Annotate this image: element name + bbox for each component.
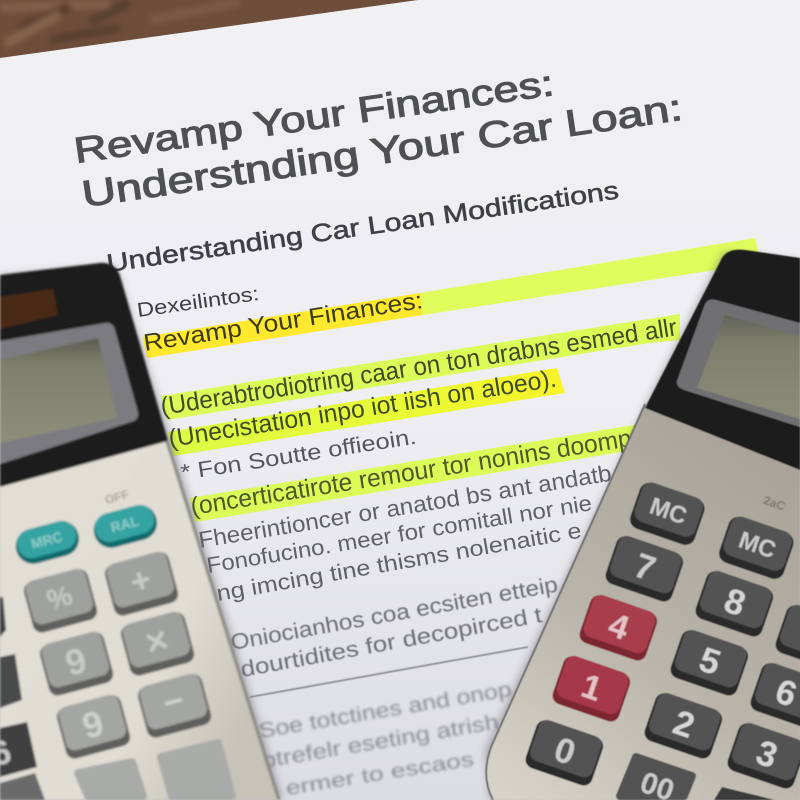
body paragraph one: Fonofucino. meer for comitall nor nie — [205, 490, 594, 578]
key: multiply — [119, 609, 196, 678]
body paragraph two — [228, 572, 560, 682]
heading: document title: Revamp Your Finances: — [71, 62, 556, 171]
label: Dexellintos: Dexeilintos: — [136, 283, 260, 322]
key: teal RAL: RAL — [109, 512, 141, 535]
divider line — [250, 647, 528, 697]
key: percent — [22, 566, 99, 635]
key: teal RAL — [90, 501, 161, 552]
key: 8 — [693, 568, 776, 639]
key: red 4: 4 — [604, 606, 634, 648]
yellow highlight band — [143, 293, 423, 358]
left solar panel — [0, 289, 58, 329]
right calculator body — [486, 404, 800, 800]
key: minus — [136, 671, 213, 740]
right display frame — [677, 300, 800, 427]
body paragraph one: Fheerintioncer or anatod bs ant andatb — [197, 460, 613, 553]
key: teal MRC — [12, 517, 83, 568]
key: 3 — [725, 720, 800, 791]
key: 0 — [523, 717, 606, 788]
body paragraph three (out of focus): ermer to escaos — [284, 748, 475, 800]
body paragraph one — [197, 460, 613, 606]
left display frame — [0, 323, 138, 464]
key: 2 — [642, 690, 725, 761]
key: nine — [38, 629, 115, 698]
key: red 4 — [577, 592, 660, 663]
key: teal MRC: MRC — [29, 528, 64, 552]
heading: document title: Understnding Your Car Loan: — [79, 87, 685, 215]
lime highlight line two — [161, 314, 680, 420]
right calculator black head — [645, 250, 800, 470]
key: bottom grey — [78, 762, 143, 796]
body paragraph three (out of focus) — [257, 678, 513, 800]
printed label above RAL key: OFF — [104, 487, 130, 507]
calculator shadows — [0, 252, 800, 800]
key: 5 — [668, 627, 751, 698]
key: 00 — [620, 757, 692, 800]
body paragraph two: dourtidites for decopirced t — [238, 602, 544, 682]
right calculator — [486, 250, 800, 800]
key: nine lower — [55, 692, 132, 761]
key: MC left — [627, 479, 708, 548]
key: bottom right partial — [714, 787, 775, 800]
body paragraph one: ng imcing tine thisms nolenaitic e — [215, 518, 583, 606]
lime highlight band — [420, 238, 761, 315]
key: 9 partial — [773, 602, 800, 673]
key: nine: 9 — [61, 639, 91, 684]
key: 0: 0 — [549, 730, 580, 773]
left calculator body — [0, 441, 277, 800]
body paragraph three (out of focus): Soe totctines and onop — [257, 678, 513, 743]
wooden table corner — [0, 0, 418, 58]
key: percent: % — [44, 579, 76, 616]
key: red 1: 1 — [577, 667, 607, 709]
left LCD screen — [0, 338, 117, 443]
key: plus — [103, 549, 180, 618]
key: multiply: × — [141, 619, 173, 665]
key: MC left: MC — [646, 493, 690, 530]
key: 6 — [748, 660, 800, 731]
line text: oncerticatirote: (oncerticatirote remour tor nonins doomp — [189, 424, 634, 521]
body paragraph three (out of focus): ptrefelr eseting atrish — [260, 711, 501, 773]
key: 7: 7 — [629, 546, 660, 589]
right LCD screen — [697, 315, 800, 419]
key: 8: 8 — [719, 581, 750, 624]
highlighted text lines — [142, 287, 679, 521]
left calculator edge shade — [167, 441, 279, 800]
line text: Unecistation: (Unecistation inpo iot iish on aloeo). — [167, 365, 558, 453]
highlighted section — [143, 238, 761, 522]
key: left dark middle — [0, 654, 22, 708]
key: MC right: MC — [735, 527, 779, 564]
key: left dark six — [0, 722, 37, 777]
key: 7 — [603, 533, 686, 604]
subheading: car loan modifications: Understanding Car Loan Modifications — [105, 176, 621, 278]
key: MC right — [716, 513, 797, 582]
left calculator — [0, 263, 279, 800]
key: 3: 3 — [751, 733, 782, 776]
line text: Fon Soutte: * Fon Soutte offieoin. — [179, 424, 418, 485]
printed label 2aC: 2aC — [762, 493, 787, 514]
key: bottom large grey — [161, 743, 232, 796]
body paragraph two: Oniocianhos coa ecsiten etteip — [228, 572, 560, 655]
left calculator black head — [0, 263, 168, 487]
key: red 1 — [550, 653, 633, 724]
key: minus: − — [159, 681, 188, 723]
line text: Uderabtrodiotring: (Uderabtrodiotring caar on ton drabns esmed allr — [159, 313, 679, 421]
lime highlight line four — [190, 424, 640, 522]
key: 2: 2 — [668, 703, 699, 746]
yellow-lime highlight line three — [168, 368, 565, 456]
key: nine lower: 9 — [78, 702, 108, 747]
yellow line text: Revamp Your Finances: — [142, 287, 425, 357]
key: left dark upper — [0, 597, 6, 637]
right calculator edge — [486, 404, 645, 800]
key: plus: + — [126, 560, 155, 602]
key: 5: 5 — [694, 640, 725, 683]
heading: document title — [71, 62, 685, 215]
key: left dark bottom — [0, 773, 45, 800]
